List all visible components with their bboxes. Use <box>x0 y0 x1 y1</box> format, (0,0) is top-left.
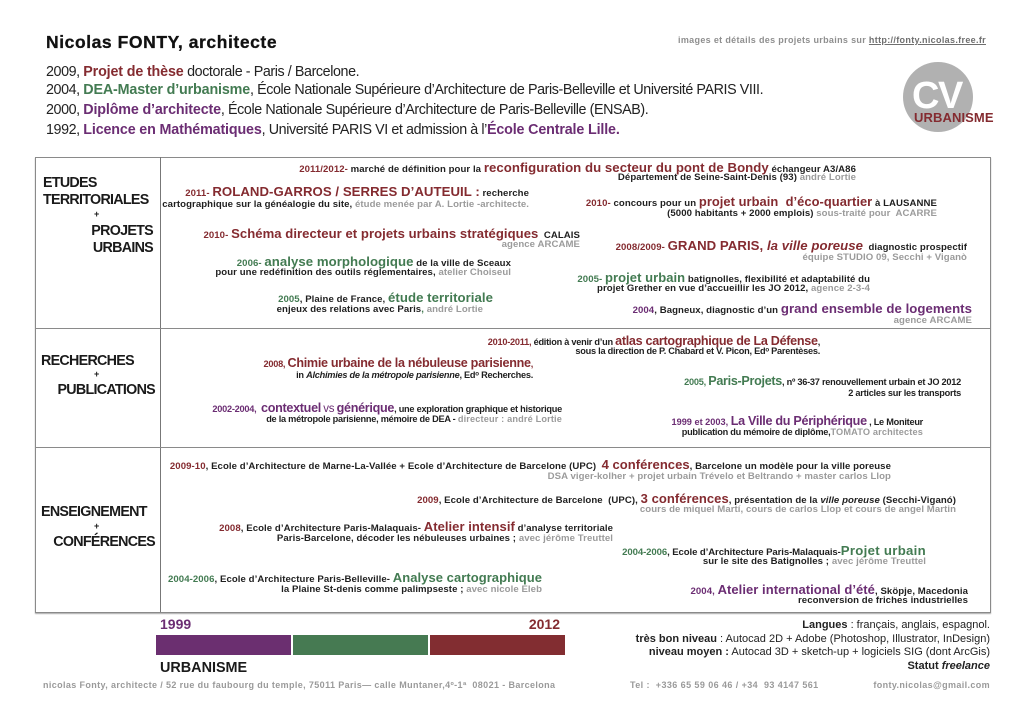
teaching: Projet urbain: 2004-2006, Ecole d’Architecture Paris-Malaquais-Projet urbain <box>622 543 926 558</box>
project: Bagneux: agence ARCAME <box>894 315 972 326</box>
teaching: Atelier international: 2004, Atelier international d’été, Sköpje, Macedonia <box>690 582 968 597</box>
project: Bondy: Département de Seine-Saint-Denis (93) andré Lortie <box>618 172 856 183</box>
skills: Langues : français, anglais, espagnol. <box>802 619 990 631</box>
project: Bondy <box>299 160 856 183</box>
project: Plaine de France: enjeux des relations avec Paris, andré Lortie <box>277 304 483 315</box>
telephone: Tel : +336 65 59 06 46 / +34 93 4147 561 <box>630 680 819 690</box>
CV badge: CV <box>912 75 962 117</box>
green bar <box>293 635 428 655</box>
timeline <box>156 616 565 676</box>
CV badge <box>903 62 994 132</box>
publication: Ville du Périphérique: 1999 et 2003, La Ville du Périphérique , Le Moniteur <box>671 414 923 428</box>
publication: Ville du Périphérique: publication du mémoire de diplôme,TOMATO architectes <box>682 427 923 437</box>
publication: Paris-Projets: 2005, Paris-Projets, nº 36-37 renouvellement urbain et JO 2012 <box>684 374 961 388</box>
section label: études: + <box>94 209 99 219</box>
project: Sceaux <box>215 254 511 278</box>
website link: images et détails des projets urbains sur http://fonty.nicolas.free.fr <box>678 35 986 45</box>
email: fonty.nicolas@gmail.com <box>873 680 990 690</box>
publication: contextuel vs générique <box>212 401 562 424</box>
teaching: 4 conférences: 2009-10, Ecole d’Architecture de Marne-La-Vallée + Ecole d’Architecture de Barcelone (UPC) 4 conférences, Barcelone un modèle pour la ville poreuse <box>170 457 891 472</box>
publication: atlas La Défense: 2010-2011, édition à venir d’un atlas cartographique de La Défense, <box>488 334 820 348</box>
publication: contextuel vs générique: de la métropole parisienne, mémoire de DEA - directeur : andré Lortie <box>266 414 562 424</box>
teaching: 3 conférences: cours de miquel Martí, cours de carlos Llop et cours de angel Martin <box>640 504 956 515</box>
project: Sceaux: 2006- analyse morphologique de la ville de Sceaux <box>237 254 511 269</box>
teaching: Atelier intensif: Paris-Barcelone, décoder les nébuleuses urbaines ; avec jérôme Treuttel <box>277 532 613 544</box>
publication: Chimie urbaine <box>263 356 533 380</box>
project: Grand Paris: 2008/2009- GRAND PARIS, la ville poreuse diagnostic prospectif <box>616 238 967 253</box>
section label: enseignement: + <box>94 521 99 531</box>
year 1999: 1999 <box>160 616 191 632</box>
teaching: Projet urbain: sur le site des Batignolles ; avec jérôme Treuttel <box>703 556 926 567</box>
project: Bondy: 2011/2012- marché de définition pour la reconfiguration du secteur du pont de Bondy échangeur A3/A86 <box>299 160 856 175</box>
project: Lausanne: 2010- concours pour un projet urbain d’éco-quartier à LAUSANNE <box>586 194 937 209</box>
project: Plaine de France <box>277 290 493 315</box>
publication: Chimie urbaine: in Alchimies de la métropole parisienne, Edᵒ Recherches. <box>296 370 533 380</box>
title: Nicolas FONTY, architecte <box>46 32 277 52</box>
education list: 2004, DEA-Master d’urbanisme, École Nationale Supérieure d’Architecture de Paris-Belleville et Université PARIS VIII. <box>46 82 763 98</box>
skills: Statut freelance <box>907 660 990 672</box>
section label: études: ETUDES <box>43 175 97 191</box>
section label: recherches: + <box>94 369 99 379</box>
publication: atlas La Défense: sous la direction de P. Chabard et V. Picon, Edᵒ Parentèses. <box>575 346 820 356</box>
project: Lausanne: (5000 habitants + 2000 emplois) sous-traité pour ACARRE <box>667 208 937 219</box>
teaching: 4 conférences: DSA viger-kolher + projet urbain Trévelo et Beltrando + master carlos Llop <box>548 470 891 482</box>
teaching: Projet urbain <box>622 543 926 567</box>
publication: Paris-Projets <box>684 374 961 398</box>
section label: enseignement: CONFÉRENCES <box>53 534 155 550</box>
teaching: Analyse cartographique: 2004-2006, Ecole d’Architecture Paris-Belleville- Analyse cartographique <box>168 570 542 585</box>
skills: très bon niveau : Autocad 2D + Adobe (Photoshop, Illustrator, InDesign) <box>636 632 990 644</box>
project: Sceaux: pour une redéfinition des outils réglementaires, atelier Choiseul <box>215 267 511 278</box>
teaching: 3 conférences <box>417 491 956 515</box>
teaching: Atelier international <box>690 582 968 606</box>
year 2012: 2012 <box>529 616 560 632</box>
project: Batignolles <box>577 270 870 294</box>
section label: enseignement <box>41 504 156 550</box>
skills: niveau moyen : Autocad 3D + sketch-up + logiciels SIG (dont ArcGis) <box>649 646 990 658</box>
project: Schéma directeur <box>203 226 580 250</box>
skills <box>636 619 990 672</box>
teaching: Atelier intensif: 2008, Ecole d’Architecture Paris-Malaquais- Atelier intensif d’analyse territoriale <box>219 519 613 534</box>
project: Grand Paris <box>616 238 967 263</box>
section label: études: URBAINS <box>93 240 153 256</box>
section label: études: TERRITORIALES <box>43 192 149 208</box>
project: Roland-Garros: cartographique sur la généalogie du site, étude menée par A. Lortie -architecte. <box>162 199 529 210</box>
project: Bagneux: 2004, Bagneux, diagnostic d’un grand ensemble de logements <box>633 301 972 316</box>
publication: Ville du Périphérique <box>671 414 924 437</box>
project: Plaine de France: 2005, Plaine de France, étude territoriale <box>278 290 493 305</box>
section label: enseignement: ENSEIGNEMENT <box>41 504 147 520</box>
education list: 2000, Diplôme d’architecte, École Nationale Supérieure d’Architecture de Paris-Belleville (ENSAB). <box>46 102 648 118</box>
section label: recherches: PUBLICATIONS <box>57 382 155 398</box>
urbanisme label: URBANISME <box>160 660 247 676</box>
publication: atlas La Défense <box>488 334 820 356</box>
section label: études: PROJETS <box>91 223 153 239</box>
project: Lausanne <box>586 194 937 219</box>
section label: études <box>43 175 154 256</box>
project: Grand Paris: équipe STUDIO 09, Secchi + Viganò <box>803 252 967 263</box>
section label: recherches: RECHERCHES <box>41 353 134 369</box>
teaching: Atelier intensif <box>219 519 613 544</box>
address: nicolas Fonty, architecte / 52 rue du faubourg du temple, 75011 Paris— calle Muntaner,4º-1ª 08021 - Barcelona <box>43 680 555 690</box>
teaching: 3 conférences: 2009, Ecole d’Architecture de Barcelone (UPC), 3 conférences, présentation de la ville poreuse (Secchi-Viganó) <box>417 491 956 506</box>
red bar <box>430 635 565 655</box>
teaching: 4 conférences <box>170 457 891 482</box>
project: Roland-Garros <box>162 184 529 210</box>
teaching: Atelier international: reconversion de friches industrielles <box>798 595 968 606</box>
publication: contextuel vs générique: 2002-2004, contextuel vs générique, une exploration graphique et historique <box>212 401 562 415</box>
project: Batignolles: 2005- projet urbain batignolles, flexibilité et adaptabilité du <box>577 270 870 285</box>
teaching: Analyse cartographique: la Plaine St-denis comme palimpseste ; avec nicole Eleb <box>281 584 542 595</box>
education list <box>46 64 763 138</box>
project: Schéma directeur: agence ARCAME <box>502 239 580 250</box>
project: Bagneux <box>632 301 972 326</box>
education list: 1992, Licence en Mathématiques, Université PARIS VI et admission à l’École Centrale Lille. <box>46 122 620 138</box>
main frame <box>35 157 991 613</box>
CV badge: URBANISME <box>914 110 994 125</box>
project: Batignolles: projet Grether en vue d’accueillir les JO 2012, agence 2-3-4 <box>597 283 870 294</box>
purple bar <box>156 635 291 655</box>
project: Schéma directeur: 2010- Schéma directeur et projets urbains stratégiques CALAIS <box>203 226 580 241</box>
education list: 2009, Projet de thèse doctorale - Paris / Barcelone. <box>46 64 359 80</box>
project: Roland-Garros: 2011- ROLAND-GARROS / SERRES D’AUTEUIL : recherche <box>185 184 529 199</box>
publication: Paris-Projets: 2 articles sur les transports <box>848 388 961 398</box>
publication: Chimie urbaine: 2008, Chimie urbaine de la nébuleuse parisienne, <box>263 356 533 370</box>
teaching: Analyse cartographique <box>168 570 542 595</box>
section label: recherches <box>41 353 156 398</box>
